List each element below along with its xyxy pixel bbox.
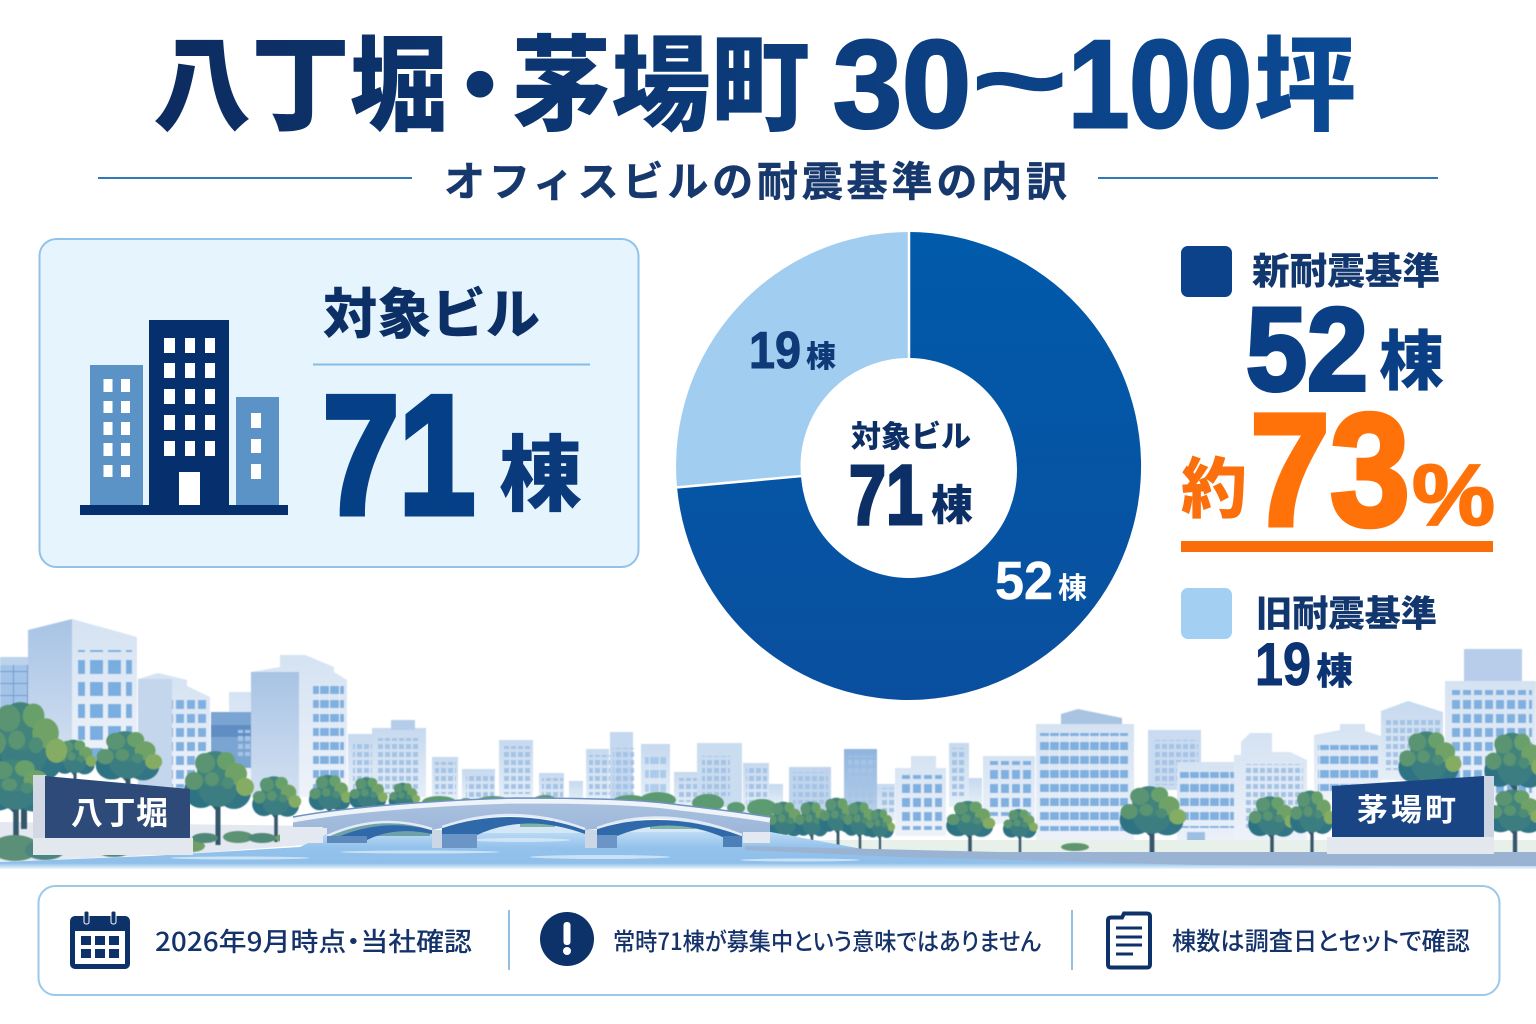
donut chart: [676, 230, 1141, 700]
big count 71: 71: [323, 361, 475, 549]
centre label: 71: [849, 448, 923, 542]
arch soffits: [340, 817, 742, 840]
title: ~: [972, 19, 1067, 142]
highlight: about 73 percent: %: [1412, 448, 1495, 544]
mid and near buildings: left: [0, 619, 347, 797]
sign: Hatchobori: [33, 775, 193, 855]
title: 茅場町: [512, 1, 810, 152]
trees: right side: [1120, 731, 1536, 866]
label: 19: [749, 322, 836, 380]
trees: middle: [766, 798, 1038, 859]
left river bank: [0, 822, 330, 862]
title: 坪: [1254, 1, 1356, 152]
icon: exclamation: [540, 912, 594, 966]
sign: Kayabacho: [1327, 776, 1494, 854]
note: survey date: 棟数は調査日とセットで確認: [1172, 922, 1470, 958]
count 52: 棟: [1379, 309, 1444, 403]
highlight: about 73 percent: [1181, 380, 1495, 559]
distant treetops behind bridge: [422, 792, 777, 817]
highlight: about 73 percent: 73: [1250, 380, 1410, 559]
deck and spandrels: [293, 803, 770, 837]
river highlights: [170, 838, 860, 862]
count 52: 52: [1246, 284, 1368, 416]
trees: left side: [0, 702, 420, 845]
sign: Kayabacho: 茅場町: [1357, 785, 1456, 830]
big count 71: 棟: [499, 408, 582, 528]
highlight: about 73 percent: 約: [1181, 436, 1247, 532]
label: 52: 52: [995, 551, 1053, 611]
footer notes panel: [38, 886, 1500, 995]
far buildings: [348, 720, 982, 820]
donut hole: [801, 362, 1017, 578]
bridge: [280, 798, 770, 848]
sign: Hatchobori: 八丁堀: [71, 788, 168, 834]
legend: old seismic standard: [1181, 585, 1437, 698]
note: meaning: 常時71棟が募集中という意味ではありません: [613, 922, 1041, 957]
icon: document: [1108, 914, 1150, 968]
right quay wall: [745, 846, 1536, 866]
count 19: 棟: [1316, 641, 1353, 695]
legend: old seismic standard: 旧耐震基準: [1256, 585, 1437, 637]
illustration: city skyline with river and bridge: [0, 619, 1536, 869]
label: 19: 棟: [806, 332, 836, 376]
note: date: 2026年9月時点・当社確認: [155, 922, 472, 959]
label: 52: 棟: [1058, 565, 1087, 607]
river: [0, 830, 1536, 869]
panel heading: 対象ビル: [323, 270, 540, 349]
legend: new seismic standard: 新耐震基準: [1252, 241, 1440, 295]
legend: new seismic standard: [1181, 241, 1444, 416]
centre label: 対象ビル: [851, 412, 971, 456]
title: 100: [1068, 16, 1252, 154]
title: 30: [833, 16, 971, 154]
centre label: 棟: [931, 472, 973, 533]
panel: target buildings: [40, 239, 638, 567]
subtitle with side rules: オフィスビルの耐震基準の内訳: [444, 148, 1067, 208]
arch rims: [327, 815, 742, 836]
centre label: [849, 412, 973, 542]
slice: old standard 19: [676, 232, 909, 487]
title: ・: [432, 11, 528, 148]
far bank seen through arches: [330, 820, 720, 836]
icon: calendar: [70, 911, 130, 969]
abutments and piers: [280, 827, 770, 848]
count 52: [1246, 284, 1444, 416]
bushes: [0, 831, 1485, 861]
mid and near buildings: right: [895, 649, 1536, 850]
icon: office buildings: [80, 320, 288, 515]
slice separators: [676, 230, 909, 488]
right river bank: [745, 840, 1536, 853]
label: 19: 19: [749, 322, 801, 380]
label: 52: [995, 551, 1087, 611]
railing: [293, 801, 770, 820]
count 19: [1255, 631, 1353, 698]
title: [153, 1, 1356, 154]
count 19: 19: [1255, 631, 1311, 698]
title: 八丁堀: [153, 1, 448, 152]
slice: new standard 52: [677, 232, 1141, 700]
